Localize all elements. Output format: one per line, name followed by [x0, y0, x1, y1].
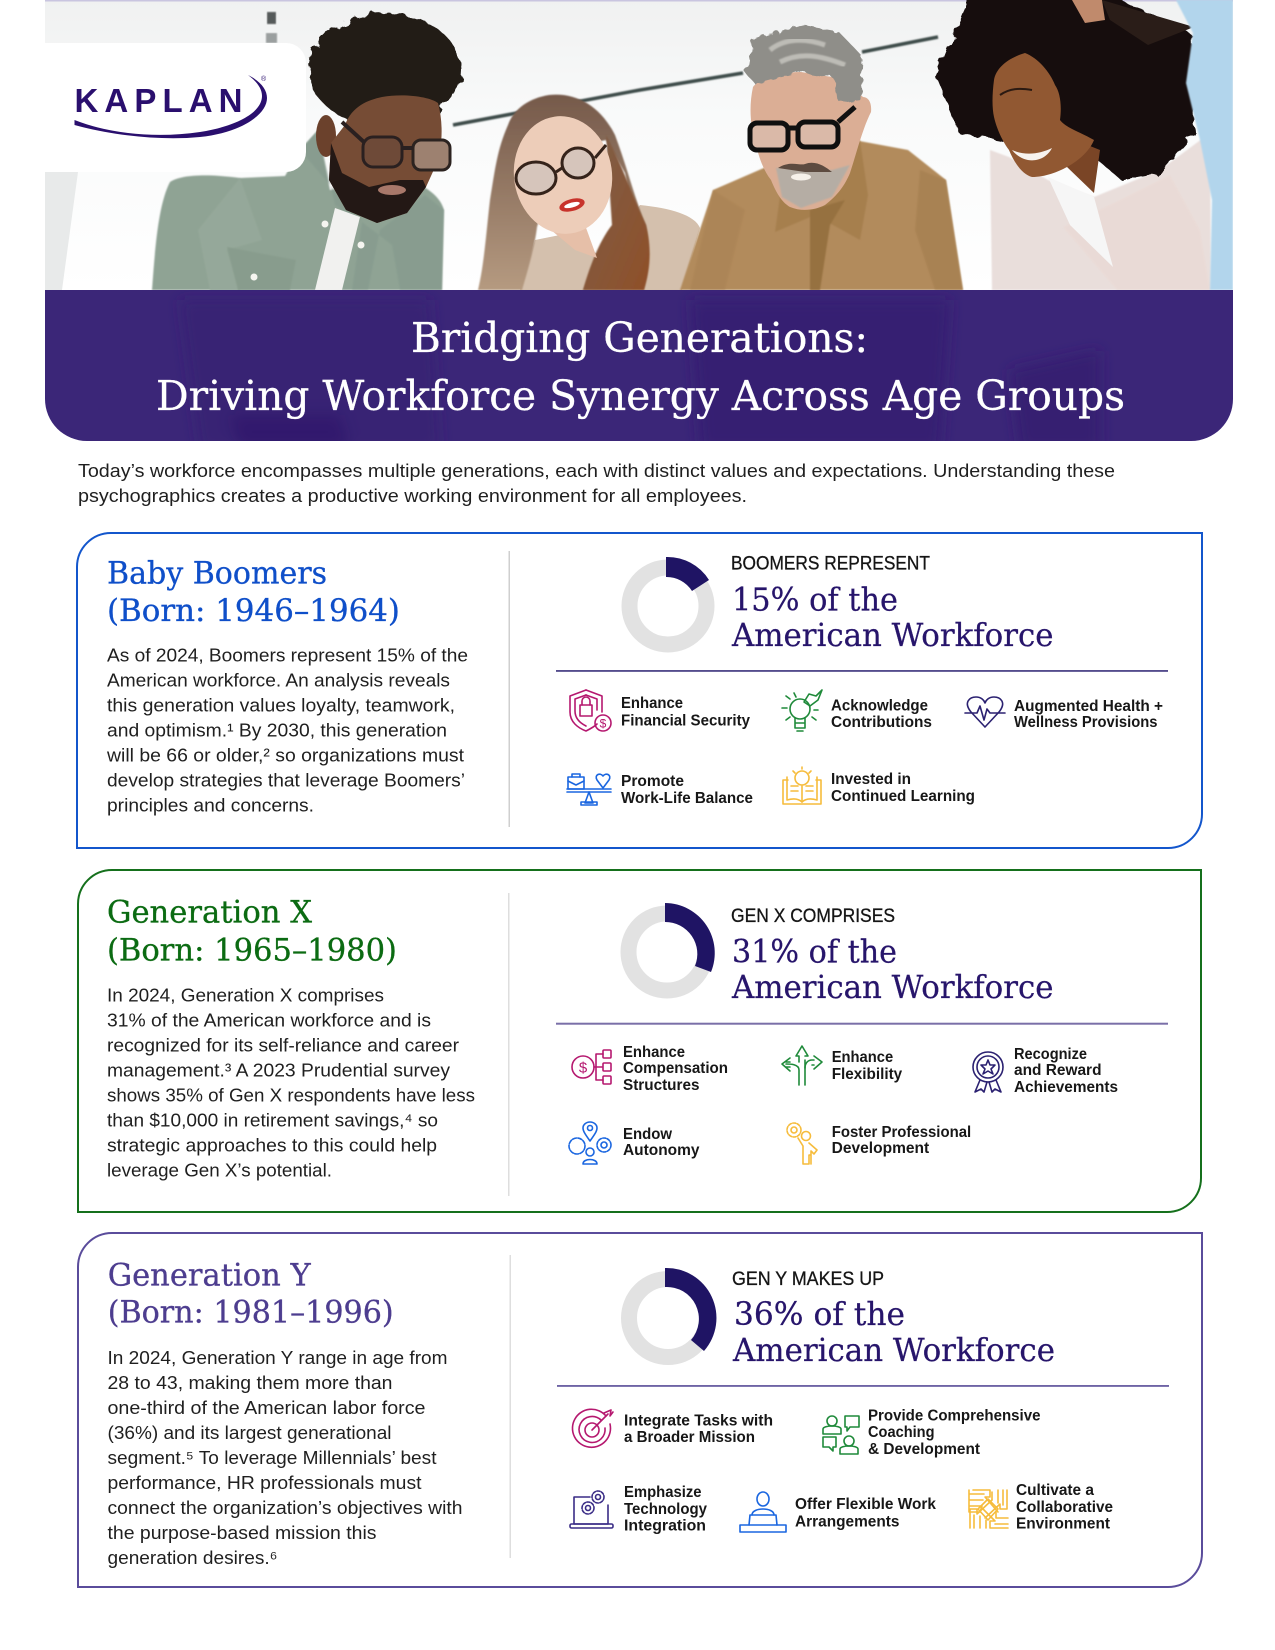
heading [107, 894, 397, 969]
stat callout: 36% of the [734, 1297, 905, 1333]
stat callout [732, 1268, 1055, 1369]
donut chart: 15% [630, 557, 709, 644]
body text: one-third of the American labor force [108, 1397, 426, 1418]
person: woman with curly hair [936, 0, 1211, 290]
label: Cultivate a [1016, 1482, 1094, 1499]
panel: Baby Boomers [77, 533, 1202, 848]
body text: leverage Gen X’s potential. [107, 1160, 332, 1181]
label: Endow [623, 1126, 673, 1143]
intro text: psychographics creates a productive working environment for all employees. [78, 485, 747, 506]
person: partial figure in blue shirt [1072, 0, 1233, 290]
label [868, 1408, 1041, 1458]
label: Structures [623, 1077, 700, 1094]
intro text: Today’s workforce encompasses multiple generations, each with distinct values and expectations. Understanding these [78, 460, 1115, 481]
icon: dollar with org chart: $ [579, 1060, 588, 1076]
stat callout [731, 552, 1054, 654]
label: Achievements [1014, 1079, 1118, 1096]
label: Financial Security [621, 713, 750, 730]
label: Coaching [868, 1424, 934, 1441]
body text: strategic approaches to this could help [107, 1135, 437, 1156]
label: Contributions [831, 714, 932, 731]
panel: Generation Y [78, 1233, 1202, 1587]
donut chart: 36% [629, 1268, 716, 1357]
body text: principles and concerns. [107, 795, 314, 816]
body text: will be 66 or older,² so organizations must [106, 745, 465, 766]
label: Enhance [623, 1044, 685, 1061]
label [832, 1124, 971, 1157]
label: Integration [624, 1518, 706, 1534]
label [624, 1412, 773, 1446]
heading: (Born: 1981–1996) [108, 1295, 394, 1331]
label: Autonomy [623, 1142, 700, 1159]
Kaplan logo [74, 75, 267, 138]
icon: interlocked hands [969, 1490, 1008, 1528]
icon: award ribbon [973, 1052, 1003, 1092]
label: Foster Professional [832, 1124, 971, 1141]
label: Recognize [1014, 1046, 1087, 1063]
icon: shield with dollar: $ [600, 716, 607, 730]
logo card [45, 43, 306, 172]
title text: Driving Workforce Synergy Across Age Groups [156, 372, 1125, 420]
label: and Reward [1014, 1062, 1102, 1079]
stat callout: 31% of the [732, 935, 897, 971]
label [832, 1049, 903, 1083]
title band [45, 290, 1233, 450]
stat callout [731, 905, 1054, 1006]
body text: and optimism.¹ By 2030, this generation [107, 720, 447, 741]
body text: In 2024, Generation Y range in age from [108, 1347, 448, 1368]
label [621, 773, 753, 807]
icon: person with gear [787, 1123, 817, 1164]
label: Development [832, 1140, 929, 1157]
body text: performance, HR professionals must [108, 1472, 422, 1493]
body text: shows 35% of Gen X respondents have less [107, 1085, 475, 1106]
title text: Bridging Generations: [411, 314, 868, 362]
person: older man in tan shirt [680, 25, 963, 290]
label [831, 771, 975, 805]
icon: bulb with plant [782, 690, 822, 731]
label: Flexibility [832, 1066, 903, 1083]
intro text [78, 460, 1115, 506]
body text: 28 to 43, making them more than [108, 1372, 392, 1393]
label [621, 695, 750, 730]
label: Enhance [832, 1049, 894, 1066]
label: Augmented Health + [1014, 698, 1163, 715]
icon: book with bulb [783, 767, 821, 804]
body text: connect the organization’s objectives with [108, 1497, 462, 1518]
icon: target with arrow [572, 1409, 613, 1447]
stat callout: GEN Y MAKES UP [732, 1268, 884, 1290]
label [831, 698, 932, 731]
label: Offer Flexible Work [795, 1496, 936, 1513]
label [1014, 698, 1163, 731]
title text [156, 314, 1125, 420]
label: Enhance [621, 695, 683, 712]
person: woman with glasses [478, 95, 700, 290]
label: Arrangements [795, 1514, 900, 1530]
panel: Generation X [78, 870, 1201, 1212]
heading: Baby Boomers [107, 556, 327, 592]
icon: coaching people and speech [823, 1416, 859, 1454]
label: Invested in [831, 771, 911, 788]
icon: person at laptop [740, 1492, 786, 1532]
label [795, 1496, 936, 1530]
body text: management.³ A 2023 Prudential survey [107, 1060, 451, 1081]
label: Continued Learning [831, 788, 975, 805]
icon: heart with pulse [965, 697, 1005, 727]
donut chart: 31% [628, 903, 715, 990]
heading: Generation X [107, 894, 312, 930]
body text: recognized for its self-reliance and career [107, 1035, 459, 1056]
heading: (Born: 1965–1980) [107, 933, 397, 969]
label: Environment [1016, 1516, 1110, 1532]
label [1016, 1482, 1113, 1532]
Kaplan logo: ® [261, 75, 267, 83]
icon: balance scale [567, 774, 611, 805]
label: Work-Life Balance [621, 790, 753, 807]
body text: In 2024, Generation X comprises [107, 985, 384, 1006]
Kaplan logo: KAPLAN [74, 82, 242, 119]
label: Collaborative [1016, 1499, 1113, 1516]
stat callout: 15% of the [732, 583, 898, 619]
body text: generation desires.⁶ [108, 1547, 278, 1568]
icon: laptop with gears [570, 1491, 613, 1528]
body text [106, 645, 468, 816]
heading: (Born: 1946–1964) [107, 593, 400, 629]
icon: branching arrows [782, 1046, 822, 1085]
body text: As of 2024, Boomers represent 15% of the [107, 645, 468, 666]
body text: segment.⁵ To leverage Millennials’ best [108, 1447, 437, 1468]
label: & Development [868, 1441, 980, 1458]
label [623, 1044, 728, 1094]
label: Wellness Provisions [1014, 714, 1158, 731]
label [623, 1126, 700, 1159]
heading: Generation Y [108, 1258, 311, 1294]
icon: autonomy pin and gears [569, 1122, 611, 1164]
label: Promote [621, 773, 684, 790]
label: Emphasize [624, 1484, 702, 1501]
label: Integrate Tasks with [624, 1412, 773, 1430]
heading [107, 556, 400, 629]
label: Technology [624, 1501, 707, 1518]
stat callout: American Workforce [731, 618, 1054, 654]
body text: the purpose-based mission this [108, 1522, 376, 1543]
body text: 31% of the American workforce and is [107, 1010, 431, 1031]
body text: (36%) and its largest generational [108, 1422, 392, 1443]
label: Provide Comprehensive [868, 1408, 1041, 1424]
stat callout: American Workforce [732, 1333, 1055, 1369]
label [1014, 1046, 1118, 1096]
label: Compensation [623, 1060, 728, 1077]
icon: shield with dollar [570, 690, 611, 731]
body text: this generation values loyalty, teamwork, [107, 695, 455, 716]
body text: develop strategies that leverage Boomers’ [107, 770, 465, 791]
stat callout: GEN X COMPRISES [731, 905, 895, 927]
heading [108, 1258, 394, 1331]
person: man with green shirt [152, 13, 461, 290]
label [624, 1484, 707, 1534]
body text: American workforce. An analysis reveals [107, 670, 450, 691]
label: a Broader Mission [624, 1429, 755, 1446]
label: Acknowledge [831, 698, 928, 715]
header photo: four colleagues [45, 0, 1233, 290]
stat callout: BOOMERS REPRESENT [731, 552, 930, 574]
stat callout: American Workforce [731, 970, 1054, 1006]
body text [107, 985, 475, 1181]
body text [108, 1347, 462, 1568]
icon: dollar with org chart [572, 1050, 611, 1084]
body text: than $10,000 in retirement savings,⁴ so [107, 1110, 438, 1131]
